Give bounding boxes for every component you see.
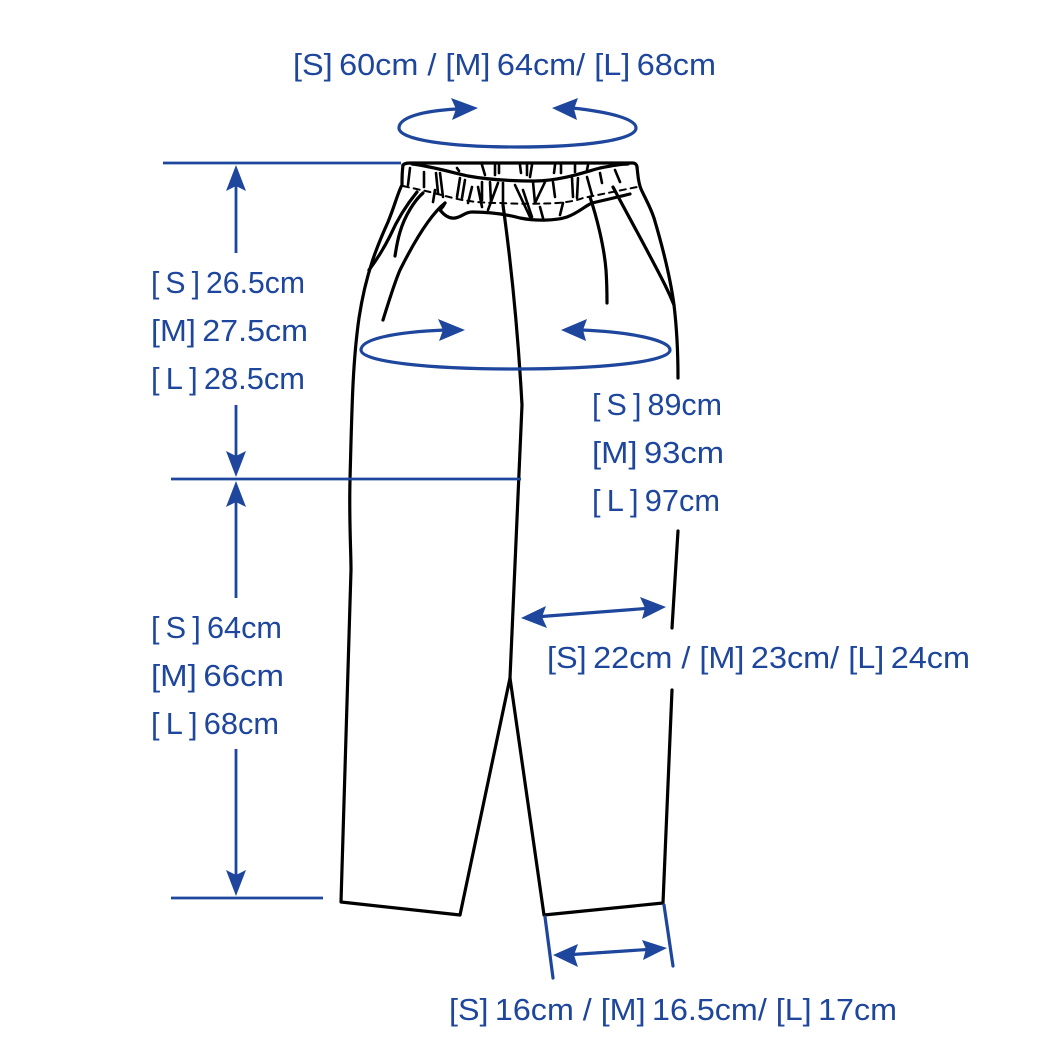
waistband stitching	[403, 186, 637, 204]
label: hip	[592, 387, 724, 518]
inseam arrow down	[226, 749, 246, 896]
label: inseam: [ L ] 68cm	[151, 706, 279, 741]
pants line drawing	[341, 163, 678, 915]
hip circumference ellipse arrow	[361, 319, 670, 369]
label: waist: [S] 60cm / [M] 64cm/ [L] 68cm	[293, 47, 716, 82]
rise arrow down	[226, 405, 246, 477]
hem guide lines	[545, 905, 673, 978]
waist circumference ellipse arrow	[399, 98, 636, 147]
waistband lower curve and pocket	[440, 194, 630, 220]
label: hem: [S] 16cm / [M] 16.5cm/ [L] 17cm	[449, 992, 897, 1027]
waistband inner curve	[412, 164, 628, 181]
thigh double arrow	[521, 597, 666, 628]
waist reference line	[163, 162, 401, 164]
waistband top edge	[403, 163, 637, 167]
right outer seam	[637, 167, 678, 378]
label: rise	[151, 265, 308, 396]
label: inseam: [M] 66cm	[151, 658, 284, 693]
left pocket lines	[369, 192, 417, 270]
label: hip: [M] 93cm	[592, 435, 724, 470]
rise arrow up	[226, 165, 246, 253]
right pocket lines	[590, 197, 607, 303]
label: inseam	[151, 610, 284, 741]
inseam arrow up	[226, 481, 246, 598]
right leg inner seam and hem	[510, 678, 672, 915]
label: rise: [M] 27.5cm	[151, 313, 308, 348]
waistband gathers	[408, 165, 620, 218]
hip reference line	[171, 478, 521, 480]
label: rise: [ L ] 28.5cm	[151, 361, 305, 396]
hem reference line	[171, 897, 323, 899]
label: rise: [ S ] 26.5cm	[151, 265, 305, 300]
label: inseam: [ S ] 64cm	[151, 610, 282, 645]
hem double arrow	[553, 940, 667, 967]
label: thigh: [S] 22cm / [M] 23cm/ [L] 24cm	[547, 640, 970, 675]
label: hip: [ L ] 97cm	[592, 483, 720, 518]
label: hip: [ S ] 89cm	[592, 387, 722, 422]
left outer seam and hem	[341, 165, 522, 915]
